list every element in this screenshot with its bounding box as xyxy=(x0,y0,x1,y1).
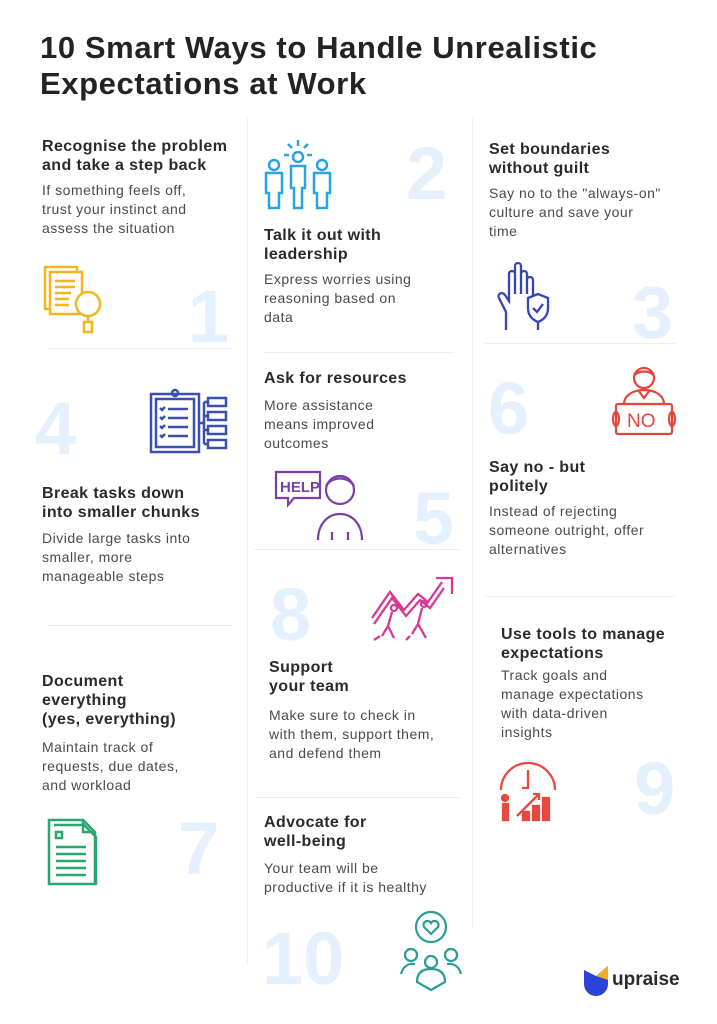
number 8: 8 xyxy=(270,573,311,656)
body 6 xyxy=(489,503,644,557)
heading 10: Advocate for xyxy=(264,814,367,831)
heading 8: Support xyxy=(269,659,333,676)
body 9: manage expectations xyxy=(501,686,644,702)
heading 3: Set boundaries xyxy=(489,141,610,158)
number 10: 10 xyxy=(262,917,344,1000)
heading 6: Say no - but xyxy=(489,459,585,476)
icon: document xyxy=(48,818,98,886)
body 1: assess the situation xyxy=(42,220,175,236)
heading 2 xyxy=(264,227,381,263)
title: 10 Smart Ways to Handle Unrealistic xyxy=(40,30,597,65)
number 5: 5 xyxy=(413,477,454,560)
body 1: trust your instinct and xyxy=(42,201,187,217)
heading 4 xyxy=(42,485,200,521)
heading 5: Ask for resources xyxy=(264,370,407,387)
heading 8 xyxy=(269,659,349,695)
heading 4: into smaller chunks xyxy=(42,504,200,521)
heading 2: leadership xyxy=(264,246,348,263)
heading 3: without guilt xyxy=(489,160,589,177)
heading 6 xyxy=(489,459,585,495)
logo: upraise xyxy=(584,966,680,996)
title: Expectations at Work xyxy=(40,66,367,101)
number 3: 3 xyxy=(632,271,673,354)
body 8 xyxy=(269,707,434,761)
heading 9: Use tools to manage xyxy=(501,626,665,643)
icon: team leader xyxy=(264,140,332,210)
body 6: Instead of rejecting xyxy=(489,503,617,519)
heading 7: everything xyxy=(42,692,127,709)
heading 2: Talk it out with xyxy=(264,227,381,244)
title xyxy=(40,30,597,101)
icon: team wellbeing xyxy=(400,910,462,992)
body 3 xyxy=(489,185,661,239)
body 2 xyxy=(264,271,411,325)
body 7: and workload xyxy=(42,777,131,793)
body 9: insights xyxy=(501,724,552,740)
body 10 xyxy=(264,860,427,895)
body 5: outcomes xyxy=(264,435,329,451)
body 9: Track goals and xyxy=(501,667,608,683)
heading 9: expectations xyxy=(501,645,604,662)
body 10: productive if it is healthy xyxy=(264,879,427,895)
icon: help xyxy=(274,470,364,540)
body 4 xyxy=(42,530,190,584)
heading 3 xyxy=(489,141,610,177)
body 4: smaller, more xyxy=(42,549,133,565)
body 2: Express worries using xyxy=(264,271,411,287)
icon: clipboard checklist xyxy=(150,388,228,454)
heading 6: politely xyxy=(489,478,548,495)
number 9: 9 xyxy=(634,747,675,830)
heading 7: (yes, everything) xyxy=(42,711,176,728)
icon: hand with shield xyxy=(497,262,550,330)
body 5: More assistance xyxy=(264,397,373,413)
icon: people carrying arrow xyxy=(371,576,454,641)
body 8: and defend them xyxy=(269,745,382,761)
body 2: reasoning based on xyxy=(264,290,396,306)
body 5: means improved xyxy=(264,416,374,432)
body 7: Maintain track of xyxy=(42,739,153,755)
body 10: Your team will be xyxy=(264,860,379,876)
body 7: requests, due dates, xyxy=(42,758,179,774)
heading 10 xyxy=(264,814,367,850)
heading 7 xyxy=(42,673,176,728)
number 6: 6 xyxy=(488,367,529,450)
body 8: Make sure to check in xyxy=(269,707,416,723)
icon: help: HELP xyxy=(280,479,320,496)
body 7 xyxy=(42,739,179,793)
heading 1: and take a step back xyxy=(42,157,207,174)
heading 10: well-being xyxy=(264,833,346,850)
number 7: 7 xyxy=(178,807,219,890)
body 9: with data-driven xyxy=(501,705,608,721)
heading 1: Recognise the problem xyxy=(42,138,227,155)
body 2: data xyxy=(264,309,293,325)
heading 1 xyxy=(42,138,227,174)
icon: person with NO sign xyxy=(612,366,676,436)
heading 4: Break tasks down xyxy=(42,485,184,502)
body 5 xyxy=(264,397,374,451)
body 3: culture and save your xyxy=(489,204,633,220)
body 3: time xyxy=(489,223,517,239)
heading 8: your team xyxy=(269,678,349,695)
body 1: If something feels off, xyxy=(42,182,186,198)
logo: upraise: upraise xyxy=(612,969,680,990)
icon: documents with magnifier xyxy=(44,266,102,334)
heading 7: Document xyxy=(42,673,123,690)
icon: person with NO sign: NO xyxy=(627,411,656,432)
icon: clock with chart xyxy=(500,762,556,822)
body 1 xyxy=(42,182,187,236)
body 6: alternatives xyxy=(489,541,567,557)
number 4: 4 xyxy=(35,387,76,470)
body 4: manageable steps xyxy=(42,568,164,584)
body 3: Say no to the "always-on" xyxy=(489,185,661,201)
body 6: someone outright, offer xyxy=(489,522,644,538)
body 8: with them, support them, xyxy=(269,726,434,742)
number 2: 2 xyxy=(406,132,447,215)
body 4: Divide large tasks into xyxy=(42,530,190,546)
number 1: 1 xyxy=(188,275,229,358)
body 9 xyxy=(501,667,644,740)
heading 9 xyxy=(501,626,665,662)
